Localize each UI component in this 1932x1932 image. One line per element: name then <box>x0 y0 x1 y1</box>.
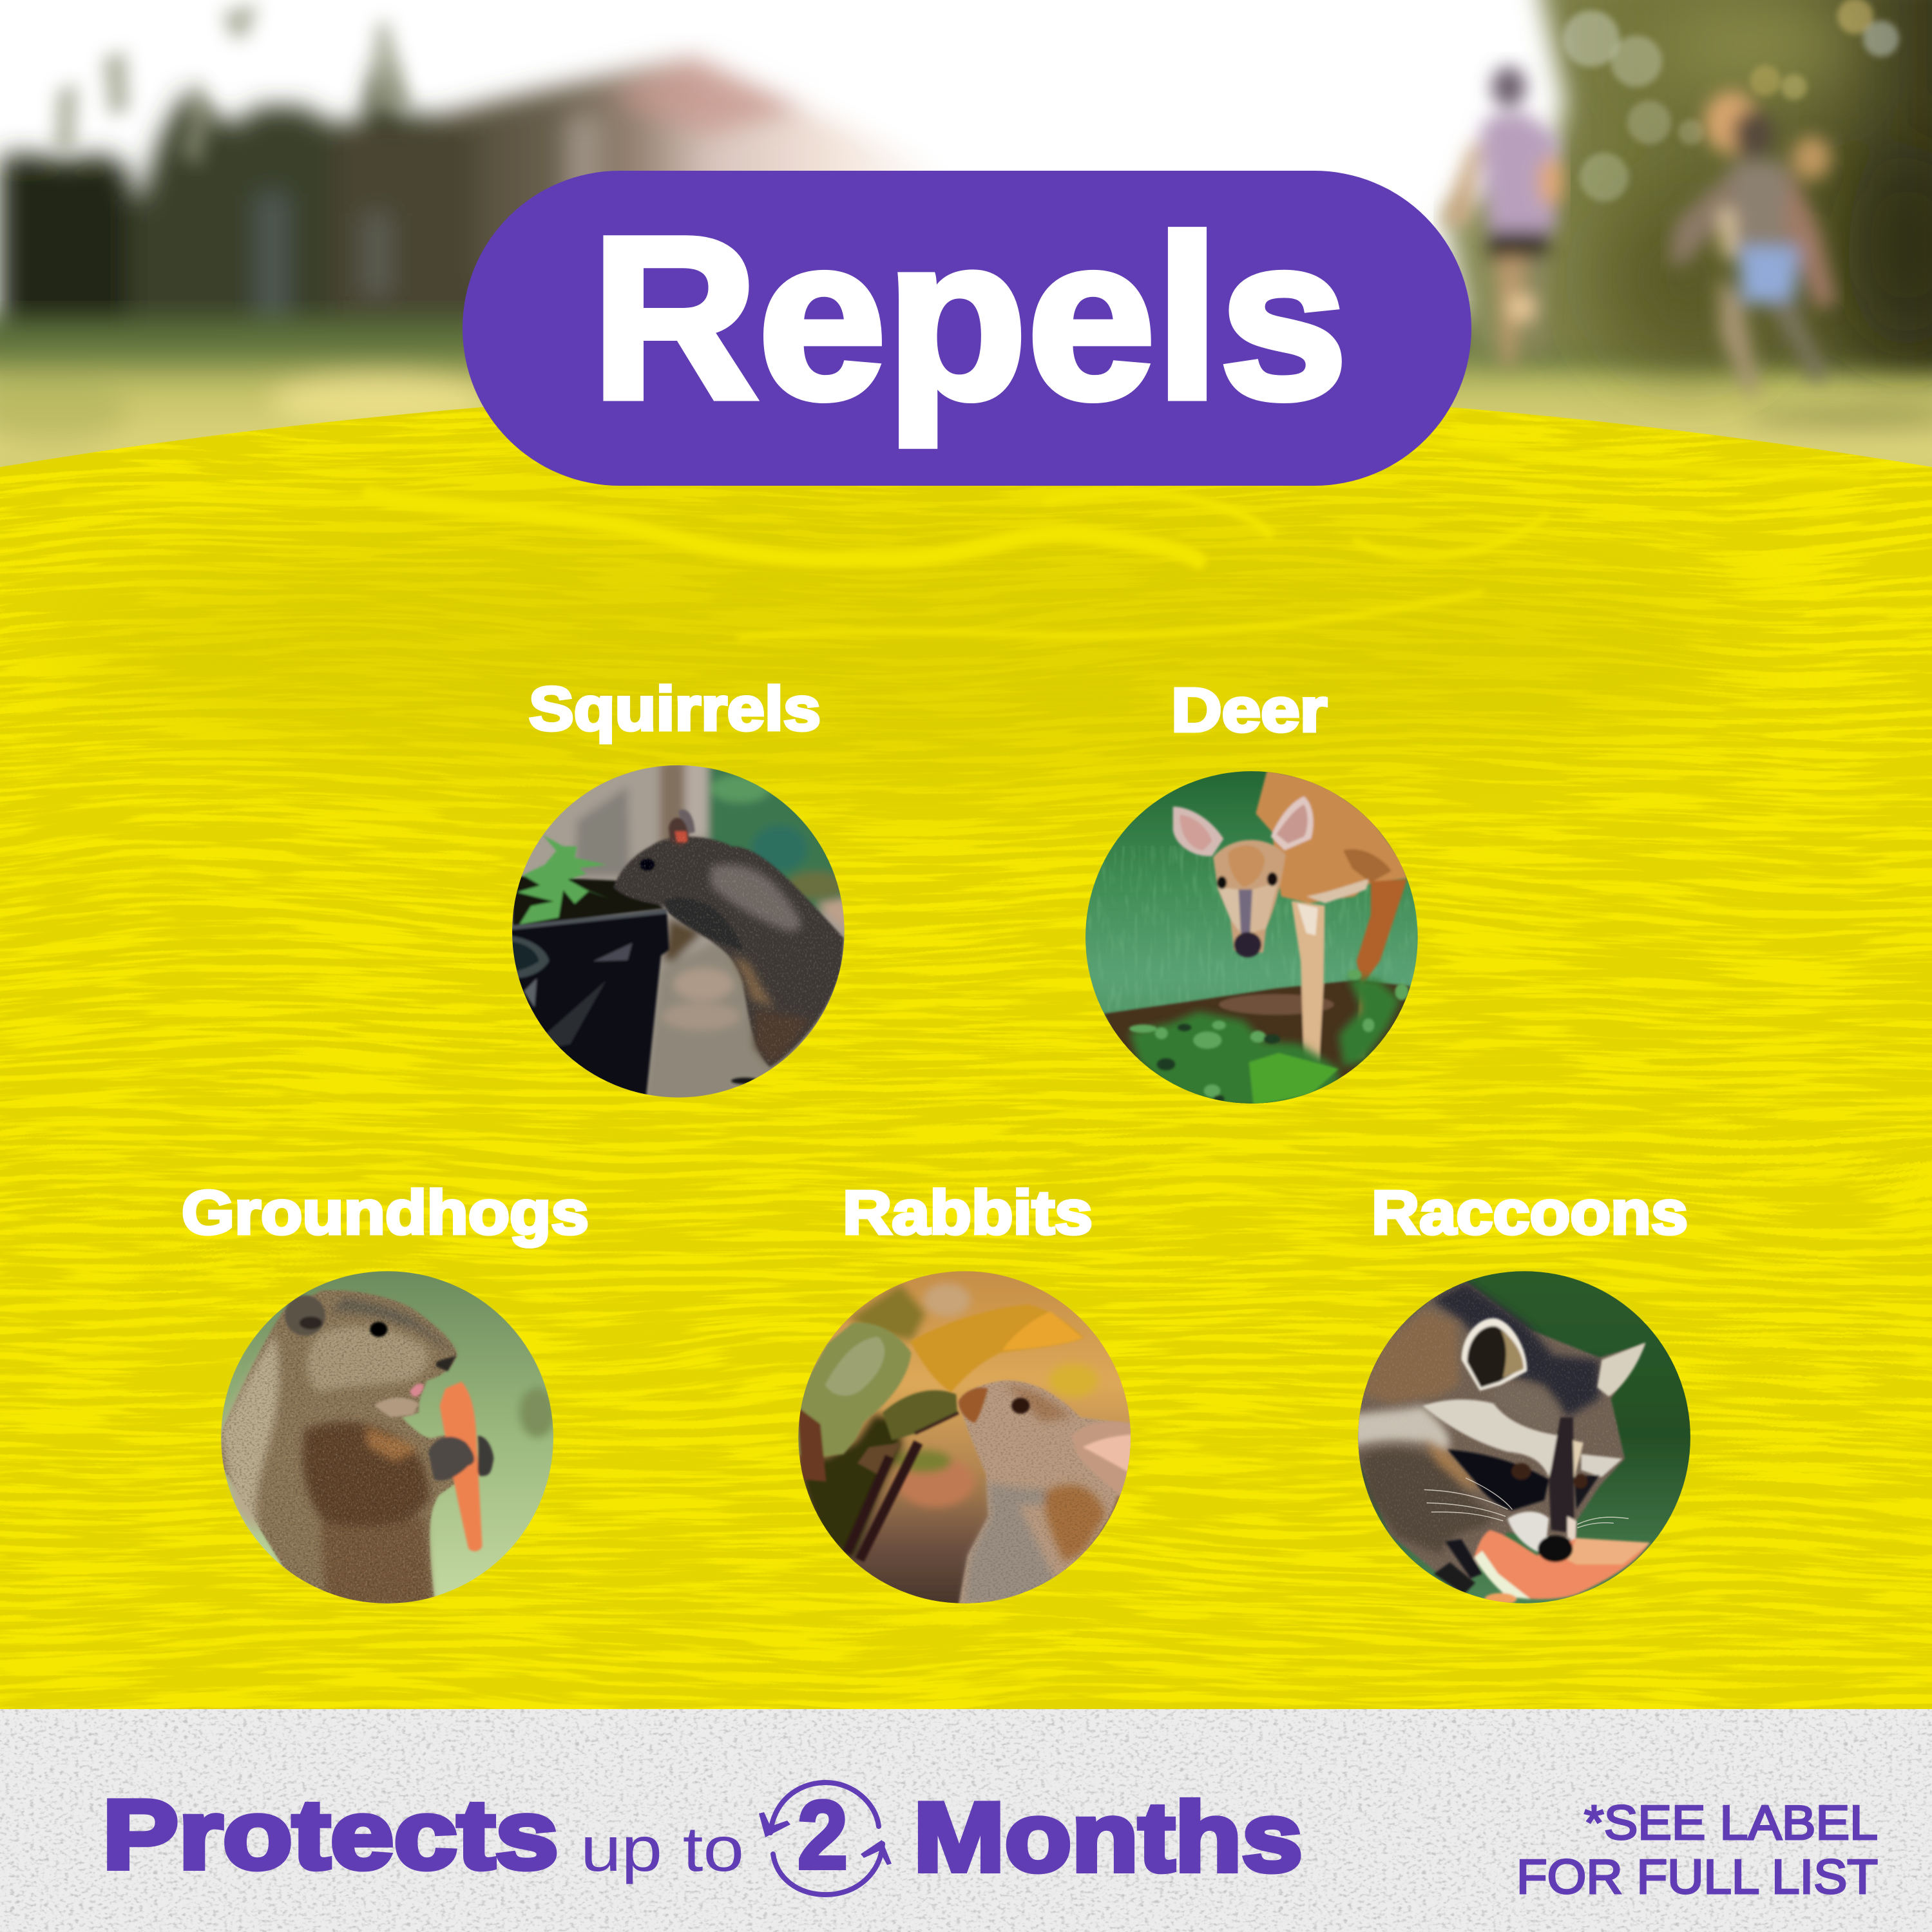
child figure 2 <box>1669 91 1836 399</box>
label: Raccoons: Raccoons <box>1372 1178 1688 1247</box>
label: Groundhogs: Groundhogs <box>182 1178 589 1247</box>
grass <box>0 316 1932 502</box>
bottom plaster band <box>0 1709 1932 1932</box>
child figure 1 <box>1440 66 1564 367</box>
footnote line 1: *SEE LABEL <box>1584 1795 1878 1850</box>
photo: squirrel at plant pot <box>512 765 845 1098</box>
sky <box>0 0 1932 490</box>
word: Protects: Protects <box>102 1780 559 1889</box>
icon: circular arrows with number 2: 2 <box>798 1781 848 1889</box>
icon: circular arrows with number 2 <box>759 1781 892 1895</box>
footnote line 2: FOR FULL LIST <box>1516 1850 1878 1904</box>
photo: groundhog eating carrot <box>206 1256 567 1617</box>
light wood grain bands <box>68 439 1866 642</box>
words: up to: up to <box>580 1813 744 1884</box>
label: Deer: Deer <box>1171 676 1327 745</box>
right trees and bokeh <box>1446 0 1932 370</box>
photo: rabbit sniffing leaves <box>786 1256 1147 1617</box>
dark grain patch <box>64 496 1739 792</box>
yellow wood panel with curved top <box>0 407 1932 1709</box>
label: Rabbits: Rabbits <box>843 1178 1093 1247</box>
photo: deer in garden <box>1086 771 1418 1104</box>
garden foliage <box>1129 977 1401 1108</box>
photo: raccoon eating melon <box>1346 1256 1707 1617</box>
background photo: backyard with children running <box>0 0 1932 502</box>
tree frond wisps against the sky <box>55 3 412 167</box>
bottom tagline: Protects up to 2 Months <box>102 1780 1303 1895</box>
title pill <box>463 171 1471 486</box>
title text: Repels <box>591 189 1348 448</box>
footnote <box>1516 1795 1878 1904</box>
word: Months: Months <box>913 1783 1303 1892</box>
label: Squirrels: Squirrels <box>529 674 821 743</box>
blurred house and tree line <box>0 57 947 361</box>
